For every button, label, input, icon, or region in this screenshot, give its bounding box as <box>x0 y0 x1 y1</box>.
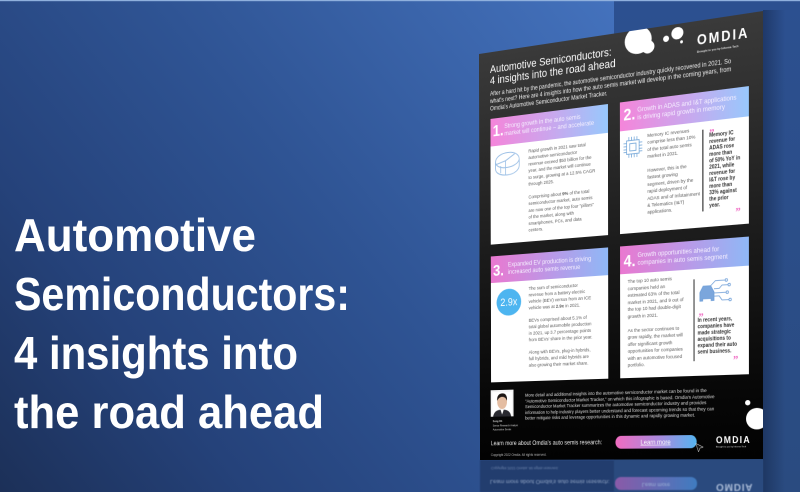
panel 2 body text: rapid deployment of <box>647 185 687 195</box>
panel 1 body text: of the market, along with <box>528 210 574 220</box>
icon: pie cylinder <box>495 152 520 176</box>
panel 3 body text: in 2021, up 3.7 percentage points <box>529 328 591 336</box>
panel 4 body text: grow rapidly, the market will <box>628 332 683 340</box>
panel 1 body text: to surge, growing at a 12.5% CAGR <box>528 168 595 180</box>
logo tagline: Brought to you by Informa Tech <box>697 45 738 54</box>
panel 4 body text: offer significant growth <box>628 340 672 347</box>
panel 3 body text: The sum of semiconductor <box>529 283 578 292</box>
panel 4 heading: Growth opportunities ahead for <box>637 245 719 259</box>
reflection of poster on floor <box>480 460 763 492</box>
number 2: 2. <box>623 104 635 124</box>
icon: chip <box>624 136 642 158</box>
panel 1 header <box>490 104 608 147</box>
panel 1 body text: year, and the market will continue <box>528 162 591 174</box>
reflected link text: Learn more about Omdia's auto semis research: <box>490 478 610 484</box>
panel 3 body text: vehicle was at 2.9x in 2021. <box>529 302 580 311</box>
panel 2 body text <box>647 128 700 215</box>
panel 2 callout: of 50% YoY in <box>709 155 740 164</box>
panel 1 body text: Rapid growth in 2021 saw total <box>528 142 586 154</box>
panel 2 callout: year. <box>709 202 720 208</box>
panel 4 body text: with an automotive focused <box>628 353 682 361</box>
panel 2 body text: market in 2021. <box>647 151 678 160</box>
close quote: ” <box>735 204 741 218</box>
panel 1 heading: market will continue – and accelerate <box>504 119 594 137</box>
panel 2 callout: the prior <box>709 194 728 202</box>
icon: connected car <box>699 278 732 302</box>
intro text <box>490 36 732 112</box>
number 1: 1. <box>493 121 504 140</box>
reflected logo: OMDIA <box>716 481 753 492</box>
footer paragraph: information to help industry players better understand and forecast upcoming trends so that they can <box>525 406 714 415</box>
reflected button: Learn more <box>642 481 670 487</box>
analyst name and role: Song Oh <box>493 420 502 423</box>
panel 4 <box>620 237 749 378</box>
panel 4 callout: companies have <box>698 322 734 330</box>
panel 4 callout: made strategic <box>698 329 731 336</box>
panel 4 callout: In recent years, <box>698 316 732 323</box>
panel 1 body text: through 2025. <box>528 179 554 187</box>
panel 2 body text: & Telematics (I&T) <box>647 199 684 208</box>
reflected button <box>615 477 697 490</box>
divider <box>702 130 703 212</box>
panel 2 header <box>620 86 749 131</box>
analyst name and role: Automotive Semis <box>493 428 511 431</box>
panel 1 body text: semiconductor market, auto semis <box>528 195 592 207</box>
omdia logo bottom: OMDIA <box>716 434 751 445</box>
panel 3 body text: Along with BEVs, plug-in hybrids, <box>529 347 591 355</box>
poster heading: 4 insights into the road ahead <box>490 57 616 87</box>
number 3: 3. <box>493 261 504 279</box>
panel 3 body text: from BEVs' share in the prior year. <box>529 334 593 343</box>
learn more label: Learn more about Omdia's auto semis research: <box>491 439 602 447</box>
panel 2 callout: more than <box>709 149 732 157</box>
panel 2 body text: Memory IC revenues <box>647 128 689 139</box>
panel 2 body text: fastest growing <box>647 172 678 181</box>
panel 4 body text: As the sector continues to <box>628 325 679 333</box>
panel 1 body text: smartphones, PCs, and data <box>528 216 582 227</box>
bottom logo tagline: Brought to you by Informa Tech <box>716 445 746 448</box>
panel 2 heading: Growth in ADAS and I&T applications <box>637 93 736 113</box>
panel 2 callout: revenue for <box>709 168 735 177</box>
intro text: After a hard hit by the pandemic, the automotive semiconductor industry quickly recovered in 2021. So <box>490 57 731 97</box>
panel 2 body text: However, this is the <box>647 164 687 174</box>
panel 4 header <box>620 237 749 274</box>
panel 2 body text: of the total auto semis <box>647 142 692 153</box>
panel 2 body text: segment, driven by the <box>647 177 693 188</box>
panel 1 heading <box>504 36 682 137</box>
analyst name and role <box>492 420 518 431</box>
intro text: Omdia's Automotive Semiconductor Market Tracker. <box>490 90 607 112</box>
footer paragraph: Semiconductor Market Tracker summarizes the automotive semiconductor industry and provides <box>525 400 706 410</box>
learn more button <box>615 435 697 449</box>
stat circle 2.9x <box>497 288 521 316</box>
panel 2 heading: is driving rapid growth in memory <box>637 103 725 121</box>
panel 3 body text: revenue from a battery electric <box>529 289 585 298</box>
panel 1 body text: are now one of the top four "pillars" <box>528 202 594 213</box>
panel 2 <box>620 86 749 234</box>
open quote: ” <box>698 310 704 324</box>
analyst name and role: Senior Research Analyst <box>493 424 518 427</box>
learn more button: Learn more <box>640 438 671 446</box>
copyright: Copyright 2022 Omdia. All rights reserved. <box>491 452 547 457</box>
panel 4 body text: portfolio. <box>628 362 645 368</box>
reflected copyright: Copyright 2022 Omdia. All rights reserved. <box>491 466 559 470</box>
panel 4 body text <box>628 276 684 368</box>
panel 3 body text: full hybrids, and mild hybrids are <box>529 354 589 362</box>
panel 4 heading <box>637 245 728 267</box>
panel 4 body text: growth in 2021. <box>628 312 658 320</box>
panel 2 callout: 33% against <box>709 187 737 196</box>
divider <box>693 279 695 361</box>
open quote: ” <box>709 126 714 140</box>
panel 1 body text <box>528 142 596 233</box>
panel 1 heading: Strong growth in the auto semis <box>504 113 581 130</box>
panel 3 body text: BEVs comprised about 5.1% of <box>529 315 587 324</box>
panel 3 <box>491 247 608 382</box>
panel 2 callout: I&T rose by <box>709 175 735 183</box>
number 4: 4. <box>624 251 636 270</box>
icon: cursor <box>695 443 704 452</box>
footer paragraph: "Automotive Semiconductor Market Tracker," on which this infographic is based. Omdia's Automotive <box>525 394 715 404</box>
footer paragraph <box>525 388 715 421</box>
panel 2 callout: ADAS rose <box>709 142 734 151</box>
panel 3 body text <box>528 283 593 368</box>
panel 4 body text: companies held an <box>628 284 665 292</box>
panel 3 body text: vehicle (BEV) versus from an ICE <box>529 295 591 304</box>
panel 4 body text: The top 10 auto semis <box>628 276 672 285</box>
decorative circles bottom right <box>745 400 763 430</box>
panel 4 body text: estimated 63% of the total <box>628 290 679 299</box>
panel 1 body text: automotive semiconductor <box>528 150 577 161</box>
intro text: what's next? Here are 4 insights into how the auto semis market will develop in the coming years, from <box>490 65 731 105</box>
stat circle 2.9x: 2.9x <box>500 295 517 309</box>
decorative white blobs top <box>624 26 684 54</box>
panel 4 callout: semi business. <box>698 348 731 355</box>
panel 2 body text: comprise less than 10% <box>647 134 695 146</box>
panel 1 <box>490 104 608 245</box>
panel 2 callout <box>709 130 740 208</box>
panel 3 body text: also growing their market share. <box>529 360 588 368</box>
footer paragraph: More detail and additional insights into the automotive semiconductor market can be found in the <box>525 388 707 398</box>
panel 3 heading <box>508 254 591 276</box>
panel 4 body text: the top 10 had double-digit <box>628 304 681 313</box>
main title: Automotive <box>14 209 256 261</box>
panel 4 callout: acquisitions to <box>698 335 731 342</box>
panel 4 body text: market in 2021, and 9 out of <box>628 297 684 306</box>
panel 3 header <box>491 247 608 283</box>
panel 2 body text: ADAS and of Infotainment <box>647 191 700 202</box>
panel 3 heading: Expanded EV production is driving <box>508 254 591 268</box>
panel 2 callout: revenue for <box>709 136 735 145</box>
panel 2 callout: Memory IC <box>709 130 734 138</box>
panel 4 body text: opportunities for companies <box>628 346 683 354</box>
panel 2 callout: 2021, while <box>709 162 734 170</box>
poster heading: Automotive Semiconductors: <box>490 45 612 76</box>
panel 1 body text: Comprising about 9% of the total <box>528 189 589 200</box>
poster <box>479 11 763 460</box>
panel 4 heading: companies in auto semis segment <box>637 252 728 267</box>
main title: 4 insights into <box>14 327 298 379</box>
omdia logo top: OMDIA <box>697 24 749 48</box>
close quote: ” <box>733 353 738 366</box>
panel 1 body text: centers. <box>528 226 543 233</box>
panel 4 callout <box>698 316 737 355</box>
main title: Semiconductors: <box>14 268 350 320</box>
panel 3 heading: increased auto semis revenue <box>508 263 580 276</box>
panel 2 callout: more than <box>709 181 732 189</box>
main title: the road ahead <box>14 386 324 438</box>
panel 2 body text: applications. <box>647 208 672 215</box>
panel 4 callout: expand their auto <box>698 341 737 349</box>
analyst photo <box>490 390 514 417</box>
panel 3 body text: total global automobile production <box>529 321 591 330</box>
footer paragraph: better mitigate risks and leverage opportunities in this dynamic and rapidly growing market. <box>525 412 695 421</box>
panel 1 body text: revenue exceed $50 billion for the <box>528 155 591 167</box>
